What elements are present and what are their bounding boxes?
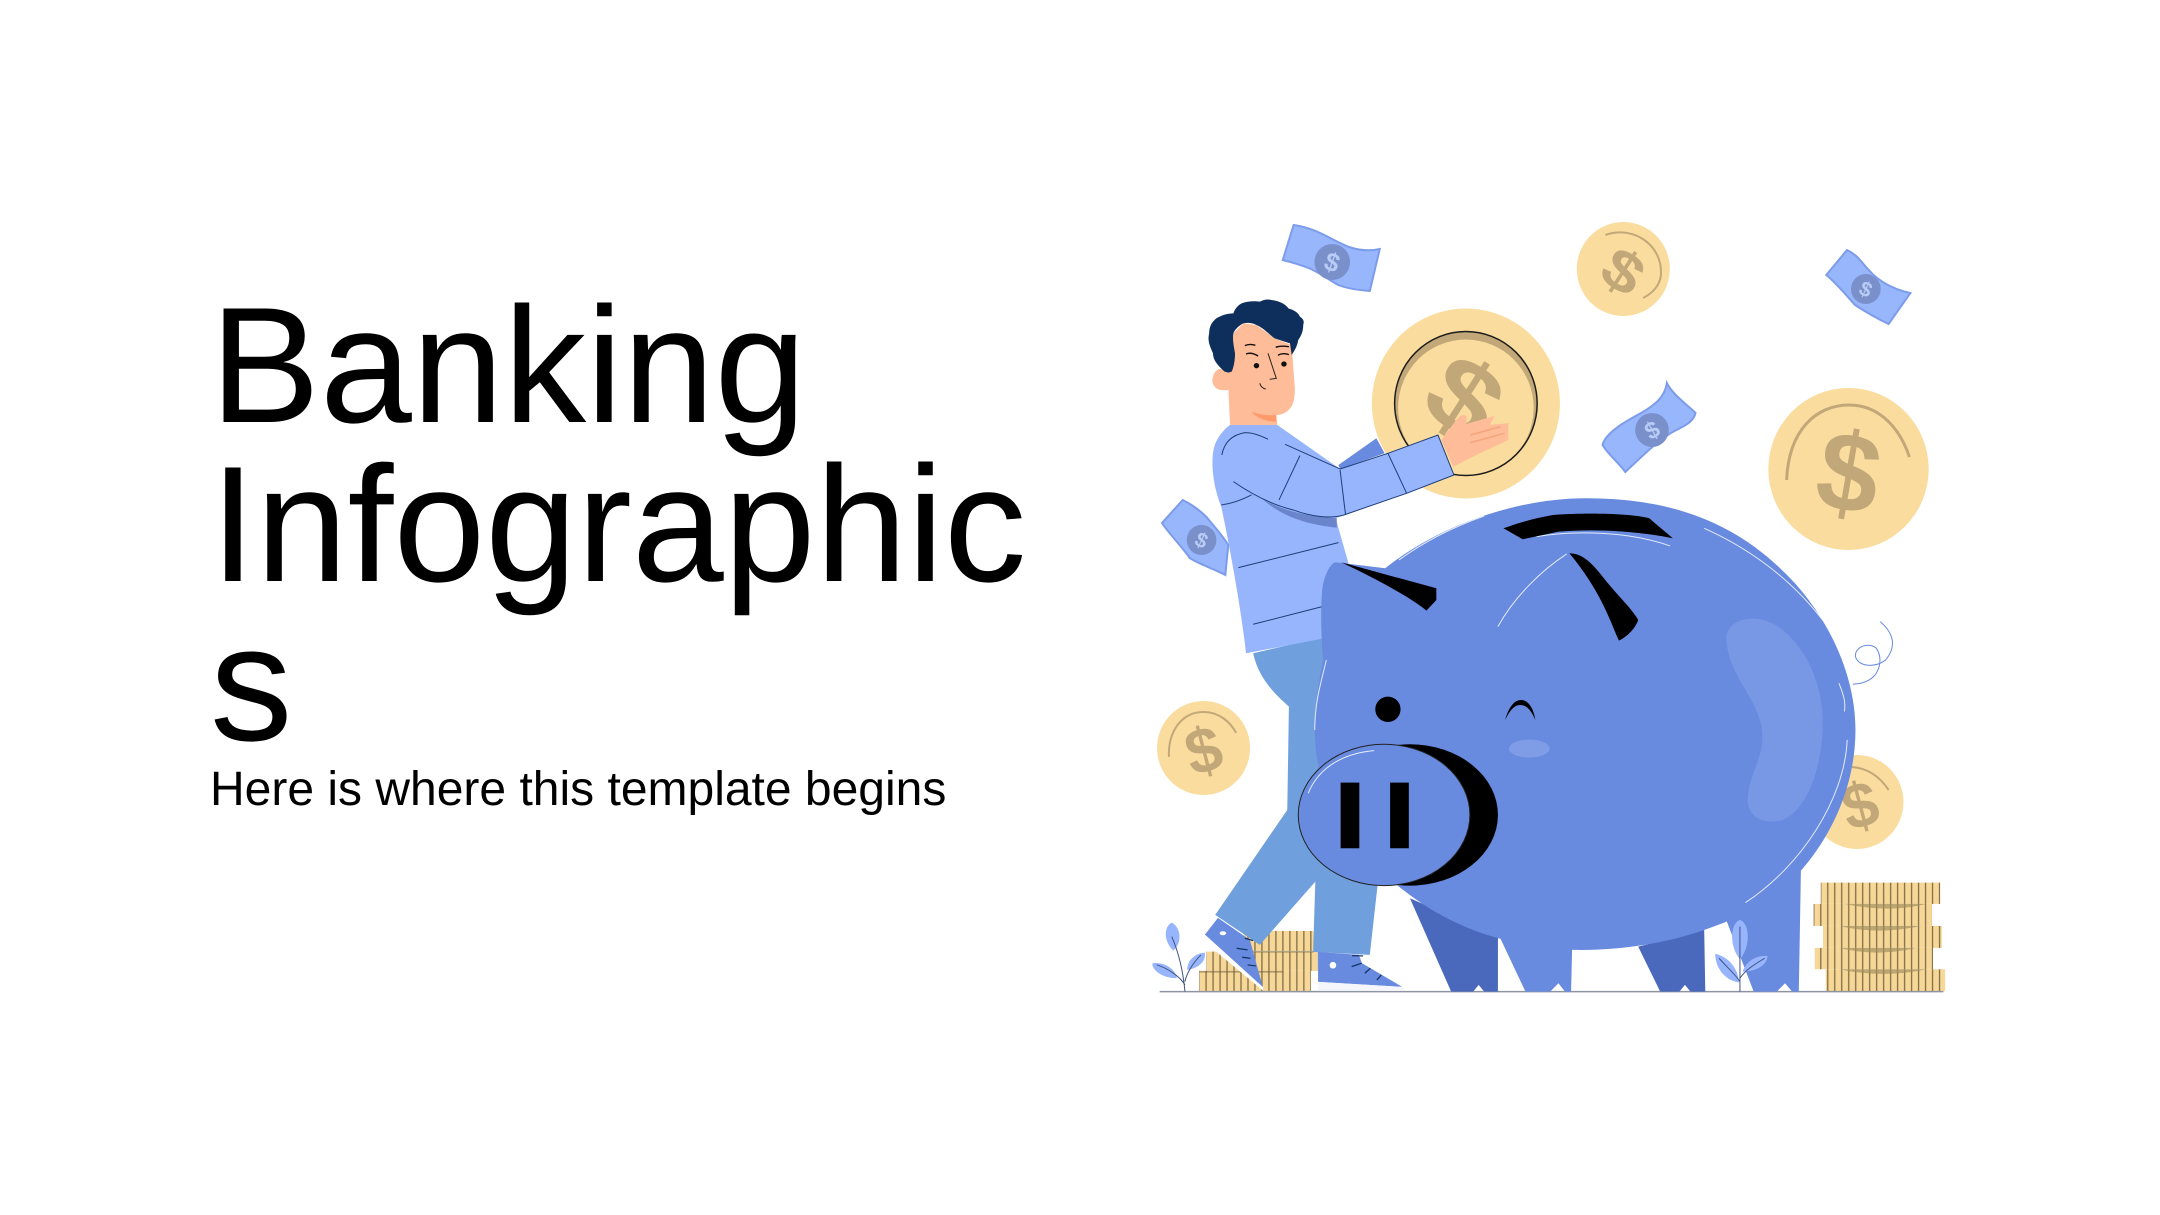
man [1202, 299, 1508, 991]
hair [1209, 299, 1304, 373]
title: Banking [210, 273, 806, 457]
coin: held by man: $ [1404, 331, 1524, 466]
title [210, 273, 1026, 775]
face details [1245, 344, 1289, 389]
coin: behind pig: $ [1834, 767, 1886, 845]
coin: held by man [1372, 308, 1560, 498]
far arm [1338, 438, 1385, 469]
subtitle: Here is where this template begins [210, 763, 946, 816]
shirt shadow and seams [1221, 433, 1454, 624]
bill: top right [1826, 250, 1910, 324]
pig: right ear [1569, 553, 1638, 641]
title: Infographic [210, 432, 1026, 616]
pig: winking eye [1505, 700, 1535, 720]
bill: left: $ [1191, 528, 1212, 554]
pig: highlight [1726, 618, 1823, 822]
pig: coin slot [1503, 514, 1673, 539]
plant: right [1715, 920, 1767, 992]
coin: left [1157, 701, 1250, 795]
shoe: back [1202, 918, 1263, 991]
plant: left [1152, 923, 1205, 992]
title: s [210, 591, 292, 775]
coin: left: $ [1178, 712, 1230, 790]
bill: left [1162, 500, 1228, 575]
hand [1441, 415, 1508, 467]
pig: near legs [1498, 833, 1802, 992]
pig: eye [1375, 697, 1401, 722]
pig: left ear [1341, 562, 1436, 611]
shirt [1212, 425, 1454, 653]
coin: right [1768, 388, 1929, 550]
bill: middle: $ [1640, 416, 1665, 446]
pig: body [1315, 498, 1855, 950]
trousers [1215, 633, 1380, 955]
bill: top right: $ [1855, 277, 1876, 303]
squiggle: pig tail [1853, 622, 1892, 684]
coin: top [1577, 222, 1670, 316]
coin stack: left [1199, 931, 1318, 991]
bill: top left [1283, 225, 1380, 291]
ground line [1160, 991, 1943, 993]
bill: middle [1603, 383, 1696, 472]
pig: cheek [1509, 740, 1550, 758]
coin: behind pig [1810, 755, 1903, 849]
shoe: front [1318, 952, 1404, 991]
coin stack: right [1814, 883, 1945, 991]
pig: body shine lines [1315, 516, 1847, 903]
bill: top left: $ [1320, 247, 1344, 279]
pig: snout [1298, 744, 1498, 886]
scene: man, pig, coin stacks [1152, 299, 1945, 992]
coin: right: $ [1808, 405, 1890, 540]
neck and face [1212, 323, 1295, 425]
coin: top: $ [1589, 233, 1657, 309]
pig: far legs [1410, 898, 1705, 992]
neck shadow [1252, 412, 1276, 422]
